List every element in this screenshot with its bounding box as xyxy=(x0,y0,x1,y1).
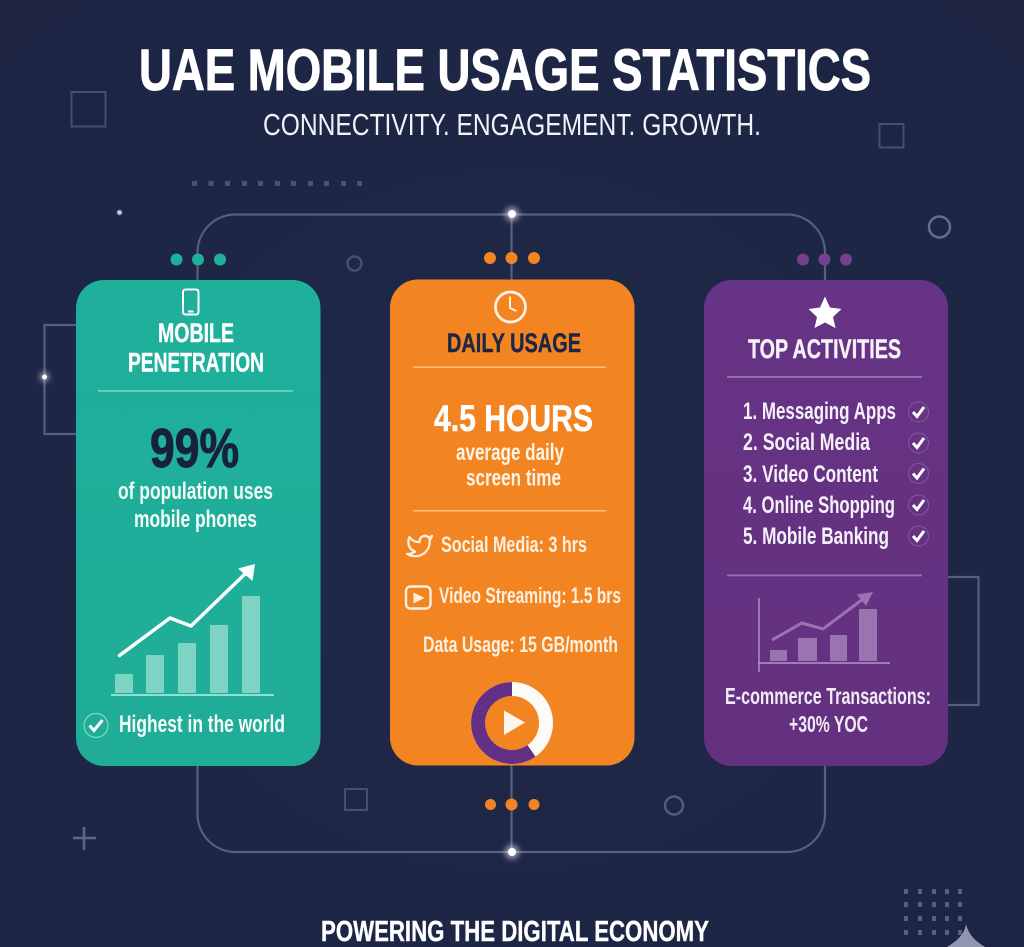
stat description: of population uses xyxy=(118,478,273,505)
icon: phone xyxy=(183,290,198,314)
stat: 99%: 99% xyxy=(150,417,239,479)
heading: TOP ACTIVITIES xyxy=(748,334,901,364)
panel: top activities xyxy=(704,280,948,766)
activities list xyxy=(743,398,896,550)
orange dots top xyxy=(484,252,540,264)
heading: DAILY USAGE xyxy=(447,328,581,358)
icon: bird xyxy=(407,536,432,556)
panel: mobile penetration xyxy=(76,280,320,766)
note: Highest in the world xyxy=(119,711,285,738)
teal dots xyxy=(170,254,226,266)
heading: PENETRATION xyxy=(128,348,264,378)
stat description: average daily xyxy=(456,439,564,465)
stat: 4.5 hours: 4.5 HOURS xyxy=(434,398,593,439)
panel: daily usage xyxy=(390,280,634,766)
stat description xyxy=(456,439,564,490)
connector frame xyxy=(44,214,978,852)
activities list: 1. Messaging Apps xyxy=(743,398,896,425)
icon: video xyxy=(406,586,430,608)
connector nodes xyxy=(40,207,519,859)
heading: MOBILE xyxy=(158,318,234,348)
video streaming row: Video Streaming: 1.5 brs xyxy=(439,583,621,608)
heading xyxy=(128,318,264,378)
activities list: 2. Social Media xyxy=(743,429,870,456)
stat description: screen time xyxy=(466,464,561,490)
bar chart xyxy=(111,564,274,695)
icon: star xyxy=(808,296,842,328)
check icons xyxy=(908,402,928,546)
donut chart xyxy=(478,689,546,757)
subtitle: CONNECTIVITY. ENGAGEMENT. GROWTH. xyxy=(263,107,761,142)
activities list: 5. Mobile Banking xyxy=(743,523,889,550)
icon: check xyxy=(84,714,108,738)
e-commerce note xyxy=(725,683,931,737)
social media row: Social Media: 3 hrs xyxy=(441,532,587,557)
icon: clock xyxy=(496,292,526,322)
stat description xyxy=(118,478,273,533)
e-commerce note: E-commerce Transactions: xyxy=(725,683,931,709)
activities list: 4. Online Shopping xyxy=(743,492,895,519)
purple dots xyxy=(797,254,852,266)
e-commerce chart xyxy=(758,592,890,672)
activities list: 3. Video Content xyxy=(743,461,878,488)
e-commerce note: +30% YOC xyxy=(789,711,868,737)
data usage row: Data Usage: 15 GB/month xyxy=(423,632,618,657)
stat description: mobile phones xyxy=(134,506,257,533)
orange dots bottom xyxy=(485,798,540,810)
